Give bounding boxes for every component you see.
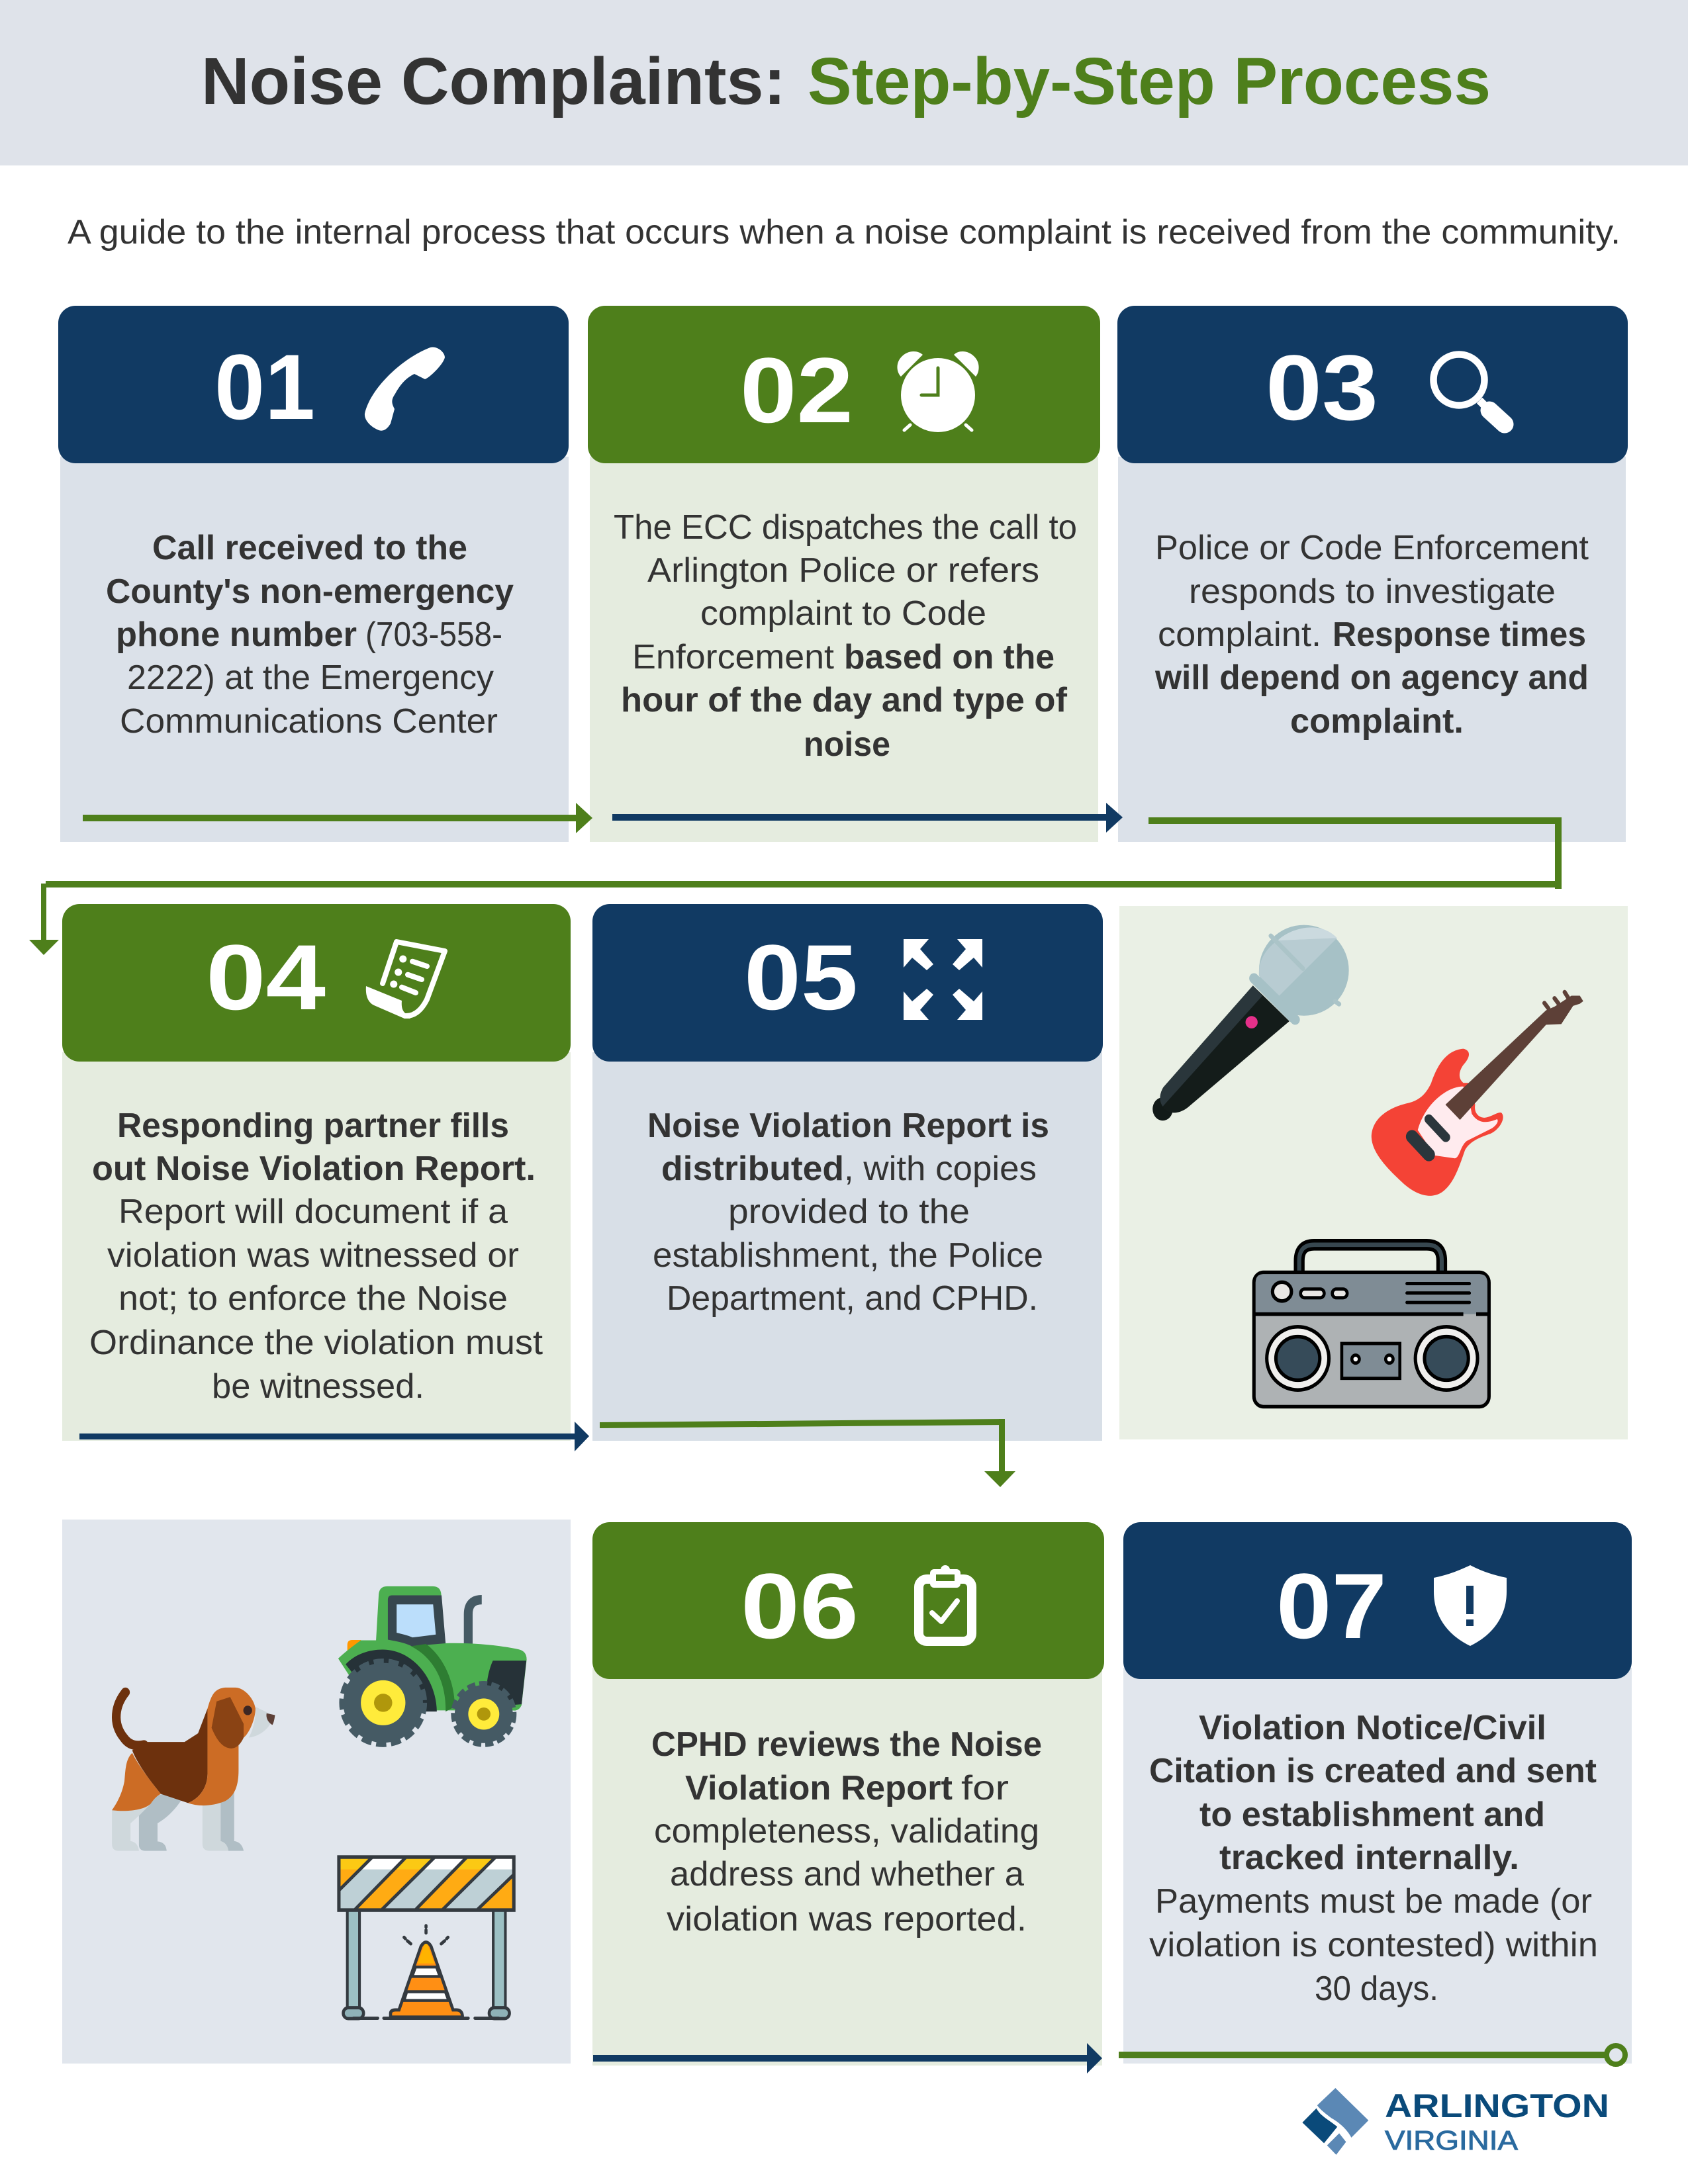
text: step 02: noise [804, 725, 890, 764]
text: step 01: (703-558- [365, 615, 502, 654]
text: step 07: violation is contested) within [1149, 1926, 1598, 1964]
text: step 03: Response times [1333, 615, 1586, 654]
header: step 04 [62, 904, 571, 1062]
icon: magnifying glass [1434, 355, 1505, 424]
illustration panel: dog, tractor and construction [62, 1520, 571, 2064]
logo mark [1302, 2088, 1368, 2155]
text: step 05: Department, and CPHD. [667, 1279, 1038, 1318]
icon: telephone handset [365, 347, 445, 431]
end marker line [1119, 2046, 1625, 2064]
number 06: 06 [741, 1554, 859, 1658]
text: step 06: CPHD reviews the Noise [651, 1725, 1042, 1764]
text: step 02: Arlington Police or refers [647, 551, 1039, 590]
logo wordmark [1385, 2087, 1609, 2156]
text: step 03: complaint. [1158, 615, 1321, 654]
arrow: step 06 to 07 [593, 2043, 1102, 2073]
text: step 05 [647, 1107, 1049, 1318]
text: step 02: hour of the day and type of [621, 681, 1068, 719]
text: step 07 [1149, 1709, 1598, 2008]
logo: Arlington Virginia [1302, 2087, 1609, 2156]
title: Step-by-Step Process [808, 44, 1491, 118]
header: step 05 [592, 904, 1103, 1062]
number 02: 02 [740, 338, 853, 442]
text: step 04: violation was witnessed or [107, 1236, 519, 1275]
text: step 01: Call received to the [152, 529, 467, 567]
panel: step 04 [62, 904, 571, 1441]
icon: alarm clock [898, 351, 979, 432]
text: step 03 [1154, 529, 1589, 741]
icon: dog [112, 1688, 275, 1851]
text: step 04: not; to enforce the Noise [118, 1279, 508, 1318]
arrow: step 03 to 04 [29, 817, 1562, 955]
panel: step 03 [1117, 306, 1628, 842]
text: step 06: for [961, 1769, 1009, 1807]
text: step 06 [651, 1725, 1042, 1938]
number 05: 05 [744, 925, 858, 1029]
number 07: 07 [1276, 1554, 1387, 1658]
text: step 05: Noise Violation Report is [647, 1107, 1049, 1145]
text: step 07: Payments must be made (or [1155, 1882, 1592, 1921]
icon: expand arrows [904, 939, 982, 1020]
text: step 06: completeness, validating [654, 1812, 1039, 1850]
text: step 02: complaint to Code [700, 594, 986, 633]
icon: microphone [1152, 925, 1349, 1120]
icon: boombox [1254, 1245, 1489, 1406]
text: step 07: tracked internally. [1219, 1839, 1519, 1877]
text: step 02: The ECC dispatches the call to [614, 508, 1077, 547]
text: step 07: Violation Notice/Civil [1199, 1709, 1546, 1747]
text: step 03: Police or Code Enforcement [1155, 529, 1589, 567]
text: step 06: violation was reported. [667, 1900, 1027, 1938]
arrow: step 05 to 06 [600, 1419, 1015, 1487]
text: step 01 [106, 529, 514, 741]
text: step 02: Enforcement [632, 638, 835, 676]
text: step 04: out Noise Violation Report. [92, 1150, 536, 1188]
subtitle: A guide to the internal process that occurs when a noise complaint is received from the community. [68, 213, 1620, 251]
logo wordmark: VIRGINIA [1385, 2125, 1519, 2156]
arrow: step 01 to 02 [83, 803, 592, 833]
text: step 02: based on the [844, 638, 1055, 676]
text: step 03: complaint. [1290, 702, 1464, 741]
icon: clipboard with check [919, 1565, 972, 1641]
number 04: 04 [206, 925, 326, 1029]
text: step 05: provided to the [728, 1193, 970, 1231]
number 03: 03 [1266, 336, 1378, 439]
panel: step 06 [592, 1522, 1104, 2066]
text: step 04: Report will document if a [118, 1193, 508, 1231]
icon: electric guitar [1372, 992, 1583, 1196]
icon: road barrier and traffic cone [339, 1857, 514, 2019]
panel: step 05 [592, 904, 1103, 1441]
text: step 06: Violation Report [685, 1769, 953, 1807]
header: step 02 [588, 306, 1100, 463]
text: step 04: Responding partner fills [117, 1107, 509, 1145]
text: step 01: Communications Center [120, 702, 498, 741]
text: step 07: to establishment and [1199, 1796, 1545, 1834]
text: step 06: address and whether a [670, 1855, 1024, 1893]
header: step 06 [592, 1522, 1104, 1679]
text: step 02 [614, 508, 1077, 764]
icon: report document [366, 942, 445, 1019]
header: step 07 [1123, 1522, 1632, 1679]
text: step 05: distributed [661, 1150, 844, 1188]
header: step 01 [58, 306, 569, 463]
illustrations group [112, 1586, 527, 2019]
illustration panel: music and noise sources [1119, 906, 1628, 1439]
header: step 03 [1117, 306, 1628, 463]
icon: shield with exclamation [1434, 1565, 1507, 1646]
panel: step 02 [588, 306, 1100, 842]
panel: step 01 [58, 306, 569, 842]
illustrations group [1152, 925, 1583, 1406]
title [201, 44, 1491, 118]
icon: tractor [338, 1586, 527, 1745]
number 01: 01 [214, 335, 315, 439]
arrow: step 02 to 03 [612, 803, 1123, 833]
text: step 01: phone number [116, 615, 357, 654]
text: step 05: establishment, the Police [653, 1236, 1043, 1275]
text: step 03: will depend on agency and [1154, 659, 1589, 697]
text: step 04 [89, 1107, 543, 1406]
text: step 05: , with copies [844, 1150, 1037, 1188]
logo wordmark: ARLINGTON [1385, 2087, 1609, 2124]
text: step 04: be witnessed. [212, 1367, 424, 1406]
text: step 07: 30 days. [1315, 1970, 1438, 2008]
text: step 01: 2222) at the Emergency [127, 659, 494, 697]
arrow: step 04 to 05 [79, 1422, 589, 1451]
text: step 04: Ordinance the violation must [89, 1324, 543, 1362]
title: Noise Complaints: [201, 44, 786, 118]
text: step 07: Citation is created and sent [1149, 1752, 1597, 1790]
text: step 01: County's non-emergency [106, 572, 514, 611]
text: step 03: responds to investigate [1189, 572, 1556, 611]
panel: step 07 [1123, 1522, 1632, 2064]
title band [0, 0, 1688, 165]
